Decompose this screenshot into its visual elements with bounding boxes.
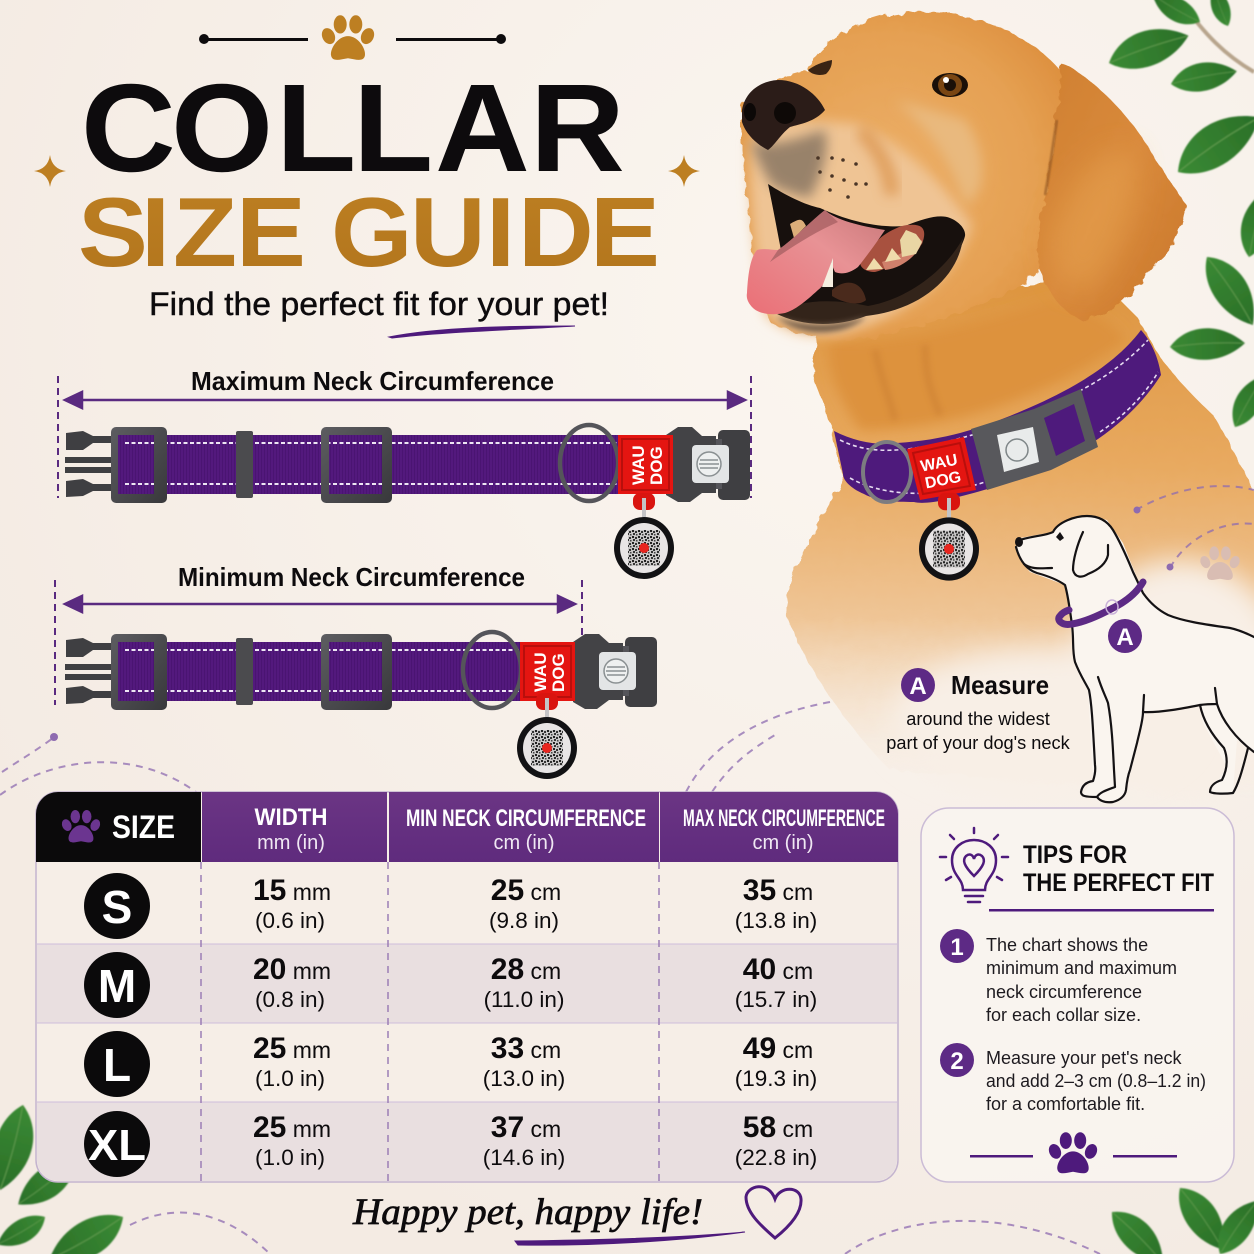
tip 1: neck circumference (986, 982, 1142, 1002)
red tag: WAU (531, 652, 550, 692)
row L: 49 cm (743, 1032, 813, 1065)
header: size: SIZE (112, 809, 175, 845)
tip 1: 1 (950, 934, 964, 961)
subtitle underline (389, 326, 575, 338)
zebra rows (37, 944, 897, 1023)
row L (84, 1031, 817, 1097)
sparkles (34, 155, 700, 187)
small dog inner chest line (1097, 677, 1115, 797)
row L: (1.0 in) (255, 1066, 325, 1091)
small dog muzzle and chest outline (1016, 547, 1144, 802)
dog mouth (768, 184, 965, 332)
dog collar buckle (971, 389, 1098, 490)
icon: heart (746, 1187, 801, 1238)
hardware (65, 634, 392, 710)
tip 1: for each collar size. (986, 1005, 1141, 1025)
tip 2: Measure your pet's neck (986, 1048, 1183, 1068)
leaves: bottom left (0, 1101, 133, 1254)
row M: 28 cm (491, 953, 561, 986)
row XL: XL (88, 1121, 146, 1170)
row L: (13.0 in) (483, 1066, 565, 1091)
tips heading: TIPS FOR (1023, 841, 1127, 869)
teeth (900, 230, 922, 257)
decorative dashed paths (0, 702, 1100, 1254)
header: min neck: MIN NECK CIRCUMFERENCE (406, 805, 646, 832)
tip 2: 2 (950, 1048, 964, 1075)
dog body (785, 280, 1254, 800)
tip 1: minimum and maximum (986, 958, 1177, 978)
heading: maximum: Maximum Neck Circumference (191, 366, 554, 396)
row S (84, 873, 817, 939)
dog neck shade (829, 300, 1125, 430)
dog collar red tag (907, 437, 976, 500)
row L: (19.3 in) (735, 1066, 817, 1091)
row S: 35 cm (743, 874, 813, 907)
dog collar red tag: DOG (924, 469, 963, 492)
row S: (0.6 in) (255, 908, 325, 933)
dog snout dark fur (750, 130, 827, 198)
gum (860, 225, 924, 272)
row S: S (102, 881, 132, 933)
measure callout: around the widest (906, 709, 1050, 729)
marker A on small dog (1108, 619, 1142, 653)
maximum collar diagram (58, 366, 751, 579)
row S: (13.8 in) (735, 908, 817, 933)
red tag: DOG (549, 653, 568, 692)
red tag: DOG (647, 446, 666, 485)
tagline underline (515, 1232, 745, 1245)
row L: 25 mm (253, 1032, 331, 1065)
subtitle: Find the perfect fit for your pet! (149, 286, 609, 322)
title: COLLAR (81, 59, 625, 198)
row M: 40 cm (743, 953, 813, 986)
decorative paw and dashes near small dog (1134, 486, 1254, 580)
row L: 33 cm (491, 1032, 561, 1065)
dog canine tooth (822, 258, 833, 287)
ring (560, 425, 618, 501)
header: width (202, 792, 387, 862)
dog nose (742, 80, 825, 150)
hardware (65, 427, 392, 503)
tips heading: THE PERFECT FIT (1023, 869, 1214, 897)
top ornament (199, 15, 506, 60)
tagline: Happy pet, happy life! (352, 1192, 703, 1233)
measure callout (886, 668, 1071, 753)
row S: 15 mm (253, 874, 331, 907)
dog ear (1037, 62, 1186, 320)
header: width: WIDTH (254, 804, 328, 831)
dog whisker dots (816, 156, 868, 199)
tip 2: for a comfortable fit. (986, 1094, 1145, 1114)
dog head (742, 12, 1073, 340)
marker A on small dog: A (1116, 624, 1134, 651)
dog collar ring (863, 442, 911, 502)
buckle (573, 634, 657, 709)
arrow: minimum (65, 596, 575, 612)
dog collar red tag: WAU (919, 452, 959, 475)
row M: (11.0 in) (484, 987, 564, 1012)
row L: L (103, 1039, 131, 1091)
small dog fill (1016, 516, 1254, 802)
tip 1: The chart shows the (986, 935, 1148, 955)
arrow: maximum (65, 392, 745, 408)
ring (463, 632, 521, 708)
header: min neck: cm (in) (493, 832, 555, 854)
small dog line drawing (1015, 516, 1254, 802)
title (78, 59, 660, 287)
size table (36, 792, 898, 1182)
dog collar strap (834, 330, 1161, 503)
strap (118, 642, 578, 701)
tip 1 (940, 929, 1177, 1025)
table body (36, 792, 898, 1182)
tips panel (921, 808, 1234, 1182)
dog pendant (919, 493, 979, 581)
heading: minimum: Minimum Neck Circumference (178, 562, 525, 592)
header: max neck: MAX NECK CIRCUMFERENCE (683, 805, 885, 832)
buckle (666, 427, 750, 502)
leaves: bottom right (1102, 1178, 1254, 1254)
icon: light bulb (940, 828, 1008, 902)
row XL: (14.6 in) (483, 1145, 565, 1170)
measure callout: Measure (951, 670, 1049, 700)
strap (118, 435, 643, 494)
header: min neck (389, 792, 659, 862)
row XL: 37 cm (491, 1111, 561, 1144)
row S: 25 cm (491, 874, 561, 907)
golden retriever illustration (742, 12, 1254, 800)
row M (84, 952, 817, 1018)
row S: (9.8 in) (489, 908, 559, 933)
small dog belly and rear legs (1143, 688, 1217, 712)
measure callout: A (909, 673, 927, 700)
row XL: (1.0 in) (255, 1145, 325, 1170)
panel footer paw (970, 1132, 1177, 1173)
row XL: 58 cm (743, 1111, 813, 1144)
lower lip (775, 238, 963, 324)
header: max neck (660, 792, 898, 862)
red tag: WAU (629, 445, 648, 485)
header: max neck: cm (in) (752, 832, 814, 854)
header: width: mm (in) (257, 832, 325, 854)
pendant (517, 693, 577, 779)
red tag (520, 642, 575, 701)
leaves: top right branch (1103, 0, 1254, 433)
row M: (15.7 in) (735, 987, 817, 1012)
tip 2: and add 2–3 cm (0.8–1.2 in) (986, 1071, 1206, 1091)
tip 2 (940, 1043, 1206, 1114)
tips heading (1023, 841, 1214, 897)
small dog collar (1059, 582, 1143, 624)
tagline (352, 1187, 801, 1245)
dog tongue (747, 210, 885, 314)
measure callout: part of your dog's neck (886, 733, 1071, 753)
dog muzzle (750, 120, 972, 336)
row M: 20 mm (253, 953, 331, 986)
row XL (84, 1111, 817, 1177)
title: SIZEGUIDE (78, 177, 660, 287)
dog eyes (932, 73, 968, 97)
small dog ear (1073, 532, 1108, 577)
lower fur under lip (776, 316, 866, 332)
small dog head and back outline (1017, 516, 1254, 637)
pendant (614, 493, 674, 579)
minimum collar diagram (55, 562, 657, 779)
small dog mouth and eye (1024, 564, 1052, 568)
row M: M (98, 960, 136, 1012)
header: size (36, 792, 201, 862)
row XL: 25 mm (253, 1111, 331, 1144)
row M: (0.8 in) (255, 987, 325, 1012)
red tag (618, 435, 673, 494)
row XL: (22.8 in) (735, 1145, 817, 1170)
